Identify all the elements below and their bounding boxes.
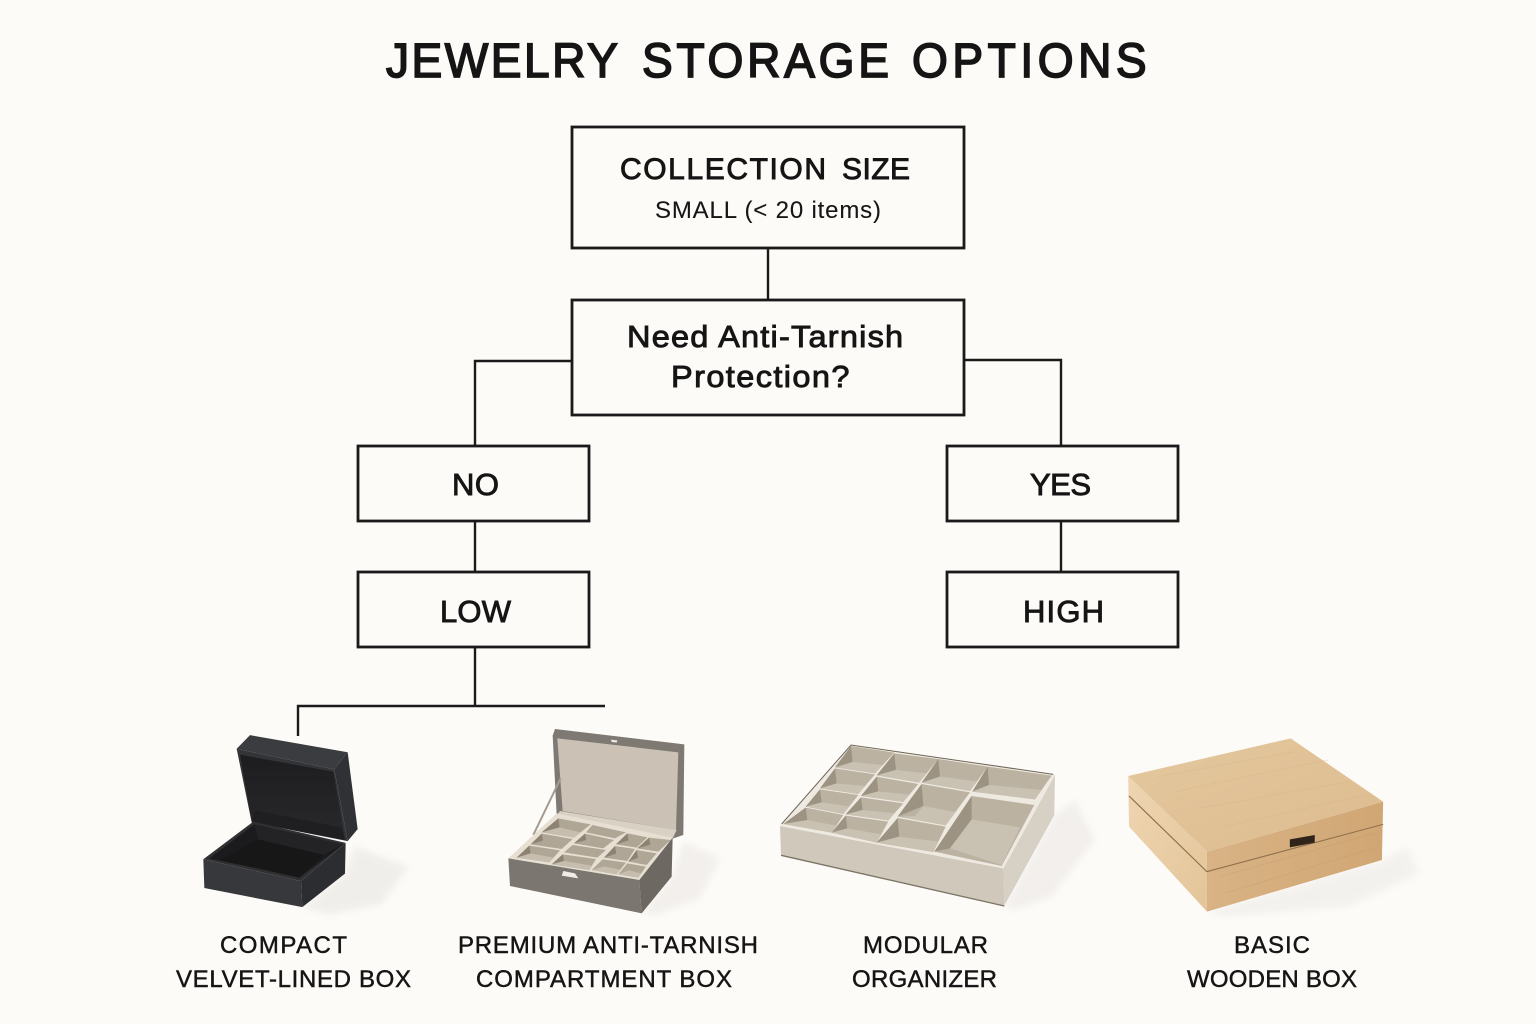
label: modular organizer — [852, 932, 997, 993]
box: no — [358, 446, 589, 521]
product: black velvet-lined box — [203, 735, 408, 915]
box: low: LOW — [440, 594, 512, 629]
label: compact velvet-lined box: VELVET-LINED BOX — [176, 966, 411, 993]
box: yes — [947, 446, 1178, 521]
connector: yes to high — [1060, 521, 1062, 572]
box: collection size: SIZE — [842, 153, 910, 186]
connector: question to no — [475, 361, 572, 446]
box: high: HIGH — [1023, 594, 1104, 629]
box: no: NO — [452, 467, 499, 502]
label: premium anti-tarnish compartment box: PREMIUM ANTI-TARNISH — [458, 932, 758, 959]
title: OPTIONS — [912, 34, 1147, 88]
connector: no to low — [474, 521, 476, 572]
label: premium anti-tarnish compartment box: COMPARTMENT BOX — [476, 966, 732, 993]
label: modular organizer: ORGANIZER — [852, 966, 997, 993]
box: collection size: SMALL (< 20 items) — [655, 197, 881, 224]
box: yes: YES — [1030, 467, 1091, 502]
connector: low to products — [298, 647, 605, 736]
connector: collection size to question — [767, 248, 769, 300]
box: collection size — [572, 127, 964, 248]
title: JEWELRY — [386, 34, 618, 88]
title — [386, 34, 1147, 88]
product: basic wooden box — [1128, 738, 1419, 917]
product: gray anti-tarnish compartment box — [508, 729, 720, 915]
box: anti-tarnish question: Protection? — [671, 359, 850, 394]
label: basic wooden box: BASIC — [1234, 932, 1310, 959]
label: basic wooden box: WOODEN BOX — [1187, 966, 1357, 993]
box: high — [947, 572, 1178, 647]
box: anti-tarnish question: Need Anti-Tarnish — [627, 319, 903, 354]
connector: question to yes — [964, 360, 1061, 446]
title: STORAGE — [642, 34, 889, 88]
label: basic wooden box — [1187, 932, 1357, 993]
label: premium anti-tarnish compartment box — [458, 932, 758, 993]
label: compact velvet-lined box: COMPACT — [220, 932, 347, 959]
label: compact velvet-lined box — [176, 932, 411, 993]
product: modular organizer — [780, 745, 1095, 910]
box: low — [358, 572, 589, 647]
label: modular organizer: MODULAR — [863, 932, 988, 959]
box: collection size: COLLECTION — [620, 153, 826, 186]
flowchart — [298, 127, 1178, 736]
box: anti-tarnish question — [572, 300, 964, 415]
